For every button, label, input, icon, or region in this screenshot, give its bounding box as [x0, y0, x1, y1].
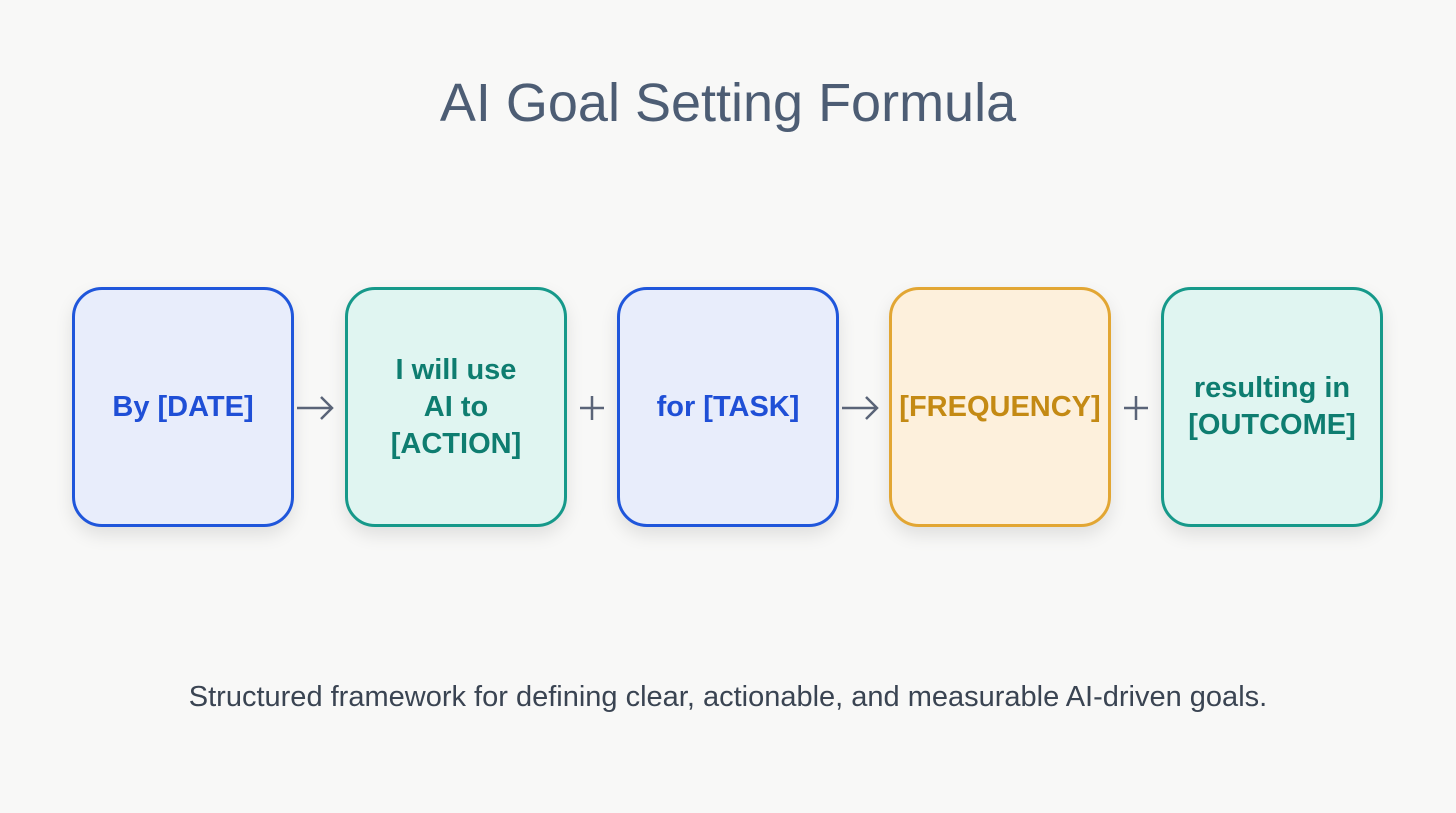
box: date: By [DATE] [112, 390, 254, 422]
arrow 1 [297, 396, 334, 420]
box: outcome [1161, 287, 1383, 527]
box: action: [ACTION] [391, 428, 521, 460]
box: frequency [889, 287, 1111, 527]
box: frequency: [FREQUENCY] [899, 390, 1101, 422]
plus 2 [1124, 396, 1148, 420]
arrow 2 [842, 396, 879, 420]
box: date [72, 287, 294, 527]
subtitle: Structured framework for defining clear, actionable, and measurable AI-driven goals. [189, 681, 1267, 713]
box: action: I will use [396, 354, 516, 386]
box: outcome: resulting in [1194, 372, 1350, 404]
title: AI Goal Setting Formula [440, 73, 1016, 133]
plus 1 [580, 396, 604, 420]
box: action: AI to [424, 390, 488, 422]
box: outcome: [OUTCOME] [1188, 409, 1356, 441]
box: task [617, 287, 839, 527]
box: task: for [TASK] [657, 390, 799, 422]
box: action [345, 287, 567, 527]
